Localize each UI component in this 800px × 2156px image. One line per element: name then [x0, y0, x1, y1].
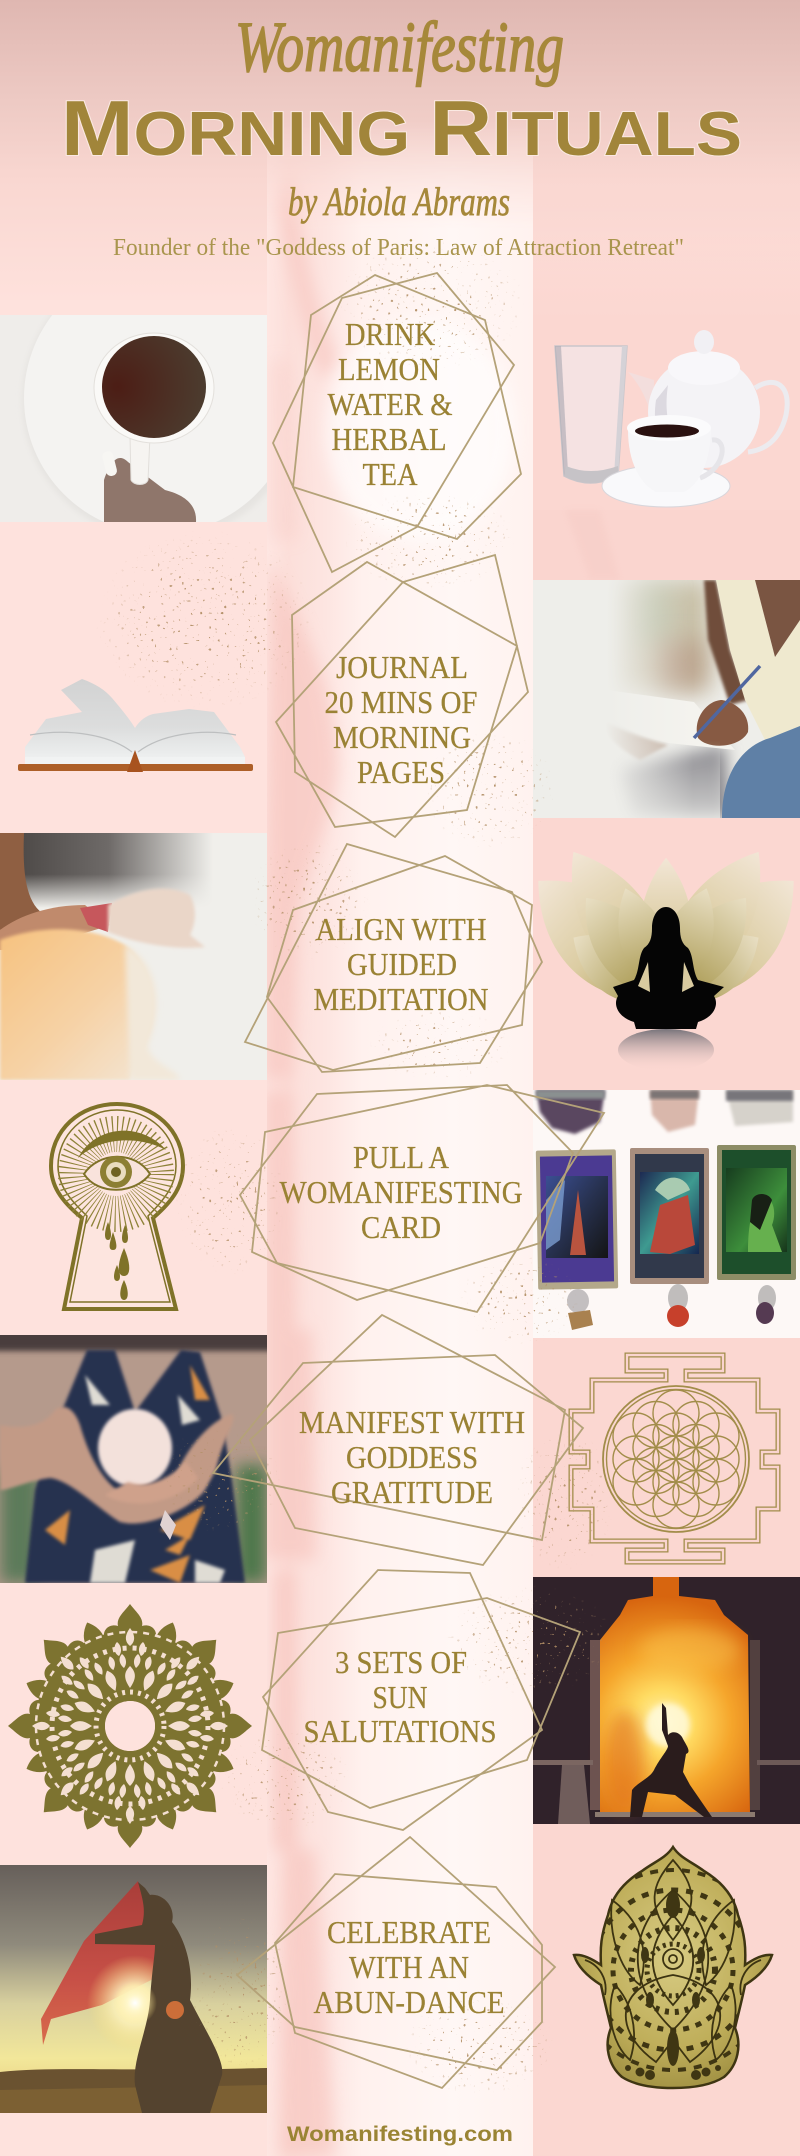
dancer silhouette: [95, 1882, 222, 2113]
title script: Womanifesting: Womanifesting: [235, 7, 564, 87]
photo: meditating hand: [0, 833, 267, 1080]
label 6: SUN: [372, 1679, 428, 1715]
hamsa ornament: [604, 1868, 742, 2072]
geometric frame 3: [245, 844, 542, 1072]
geometric frame 6: [262, 1570, 580, 1830]
geometric frame 1: [273, 273, 521, 572]
panel: ritual 7 abun-dance: [237, 1837, 555, 2088]
label 2: 20 MINS OF: [324, 684, 478, 720]
panel: centre marble column: [262, 0, 800, 2156]
label 7: WITH AN: [349, 1949, 469, 1985]
card: Kali: [536, 1149, 618, 1290]
icon: keyhole with eye: [51, 1104, 183, 1309]
label 7: [314, 1914, 504, 2020]
dress: [25, 1350, 245, 1583]
label 1: HERBAL: [332, 421, 446, 457]
icon: golden hamsa: [573, 1847, 773, 2088]
label 7: ABUN-DANCE: [314, 1984, 504, 2020]
photo: woman writing in notebook: [533, 580, 800, 818]
label 2: JOURNAL: [336, 649, 468, 685]
subtitle: Founder of the "Goddess of Paris: Law of Attraction Retreat": [113, 235, 684, 261]
geometric frame 2: [276, 555, 528, 837]
icon: mandala: [8, 1604, 252, 1848]
label 5: [299, 1404, 525, 1510]
panel: ritual 4 card: [240, 1085, 604, 1312]
label 5: GRATITUDE: [331, 1474, 493, 1510]
label 1: DRINK: [345, 316, 435, 352]
label 2: [324, 649, 478, 790]
label 4: [280, 1139, 522, 1245]
label 4: CARD: [361, 1209, 441, 1245]
panel: ritual 2 journal: [276, 555, 528, 837]
red scarf: [41, 1881, 163, 2045]
flower of life: [603, 1386, 749, 1532]
label 1: LEMON: [338, 351, 440, 387]
geometric frame 7: [237, 1837, 555, 2088]
label 2: PAGES: [357, 754, 445, 790]
yantra frame: [571, 1355, 778, 1562]
byline: by Abiola Abrams: [288, 179, 510, 224]
label 3: [314, 911, 488, 1017]
label 5: MANIFEST WITH: [299, 1404, 525, 1440]
photo: hands holding rose quartz sphere: [0, 1335, 267, 1583]
panel: ritual 3 meditation: [245, 844, 542, 1072]
label 3: MEDITATION: [314, 981, 488, 1017]
teardrops: [105, 1222, 129, 1300]
crystals top: [536, 1090, 793, 1134]
title: [61, 7, 742, 261]
icon: flower of life yantra: [571, 1355, 778, 1562]
silhouette: [613, 907, 724, 1029]
icon: open book: [18, 679, 253, 772]
label 2: MORNING: [333, 719, 471, 755]
woman silhouette: [630, 1703, 712, 1817]
lotus petals: [510, 834, 800, 1031]
eye rays: [76, 1134, 156, 1214]
label 6: SALUTATIONS: [304, 1713, 496, 1749]
stones: [567, 1284, 776, 1330]
label 4: PULL A: [353, 1139, 449, 1175]
card: second goddess: [630, 1148, 709, 1284]
dress print: [45, 1365, 210, 1583]
label 1: [328, 316, 453, 492]
panel: ritual 5 gratitude: [213, 1315, 583, 1565]
icon: glass of water: [555, 346, 627, 483]
photo: hand holding coffee cup: [0, 315, 267, 522]
label 3: ALIGN WITH: [316, 911, 486, 947]
panel: ritual 6 sun salutations: [262, 1570, 580, 1830]
label 5: GODDESS: [346, 1439, 478, 1475]
eye: [84, 1157, 150, 1190]
hands: [0, 1407, 233, 1524]
photo: teapot, glass and cup: [555, 330, 787, 507]
icon: teapot: [628, 330, 787, 468]
label 7: CELEBRATE: [327, 1914, 491, 1950]
panel: ritual 1 drink lemon water: [273, 273, 521, 572]
label 1: TEA: [362, 456, 418, 492]
photo: dancer with red scarf at sunset: [0, 1865, 267, 2113]
footer website: Womanifesting.com: [287, 2123, 513, 2146]
label 3: GUIDED: [347, 946, 457, 982]
card: green goddess: [717, 1145, 796, 1280]
gold speckles: [95, 240, 615, 2095]
photo: yoga pose in fiery window: [533, 1577, 800, 1824]
rose quartz sphere: [98, 1409, 172, 1487]
icon: lotus with meditating silhouette: [510, 834, 800, 1071]
photo: tarot cards and crystals: [533, 1090, 800, 1338]
title: Morning Rituals: MORNING RITUALS: [61, 84, 742, 172]
label 6: 3 SETS OF: [335, 1644, 467, 1680]
label 4: WOMANIFESTING: [280, 1174, 522, 1210]
geometric frame 5: [213, 1315, 583, 1565]
geometric frame 4: [240, 1085, 604, 1312]
icon: cup and saucer: [602, 415, 730, 507]
label 6: [304, 1644, 496, 1749]
label 1: WATER &: [328, 386, 453, 422]
sun flare: [87, 1955, 183, 2051]
